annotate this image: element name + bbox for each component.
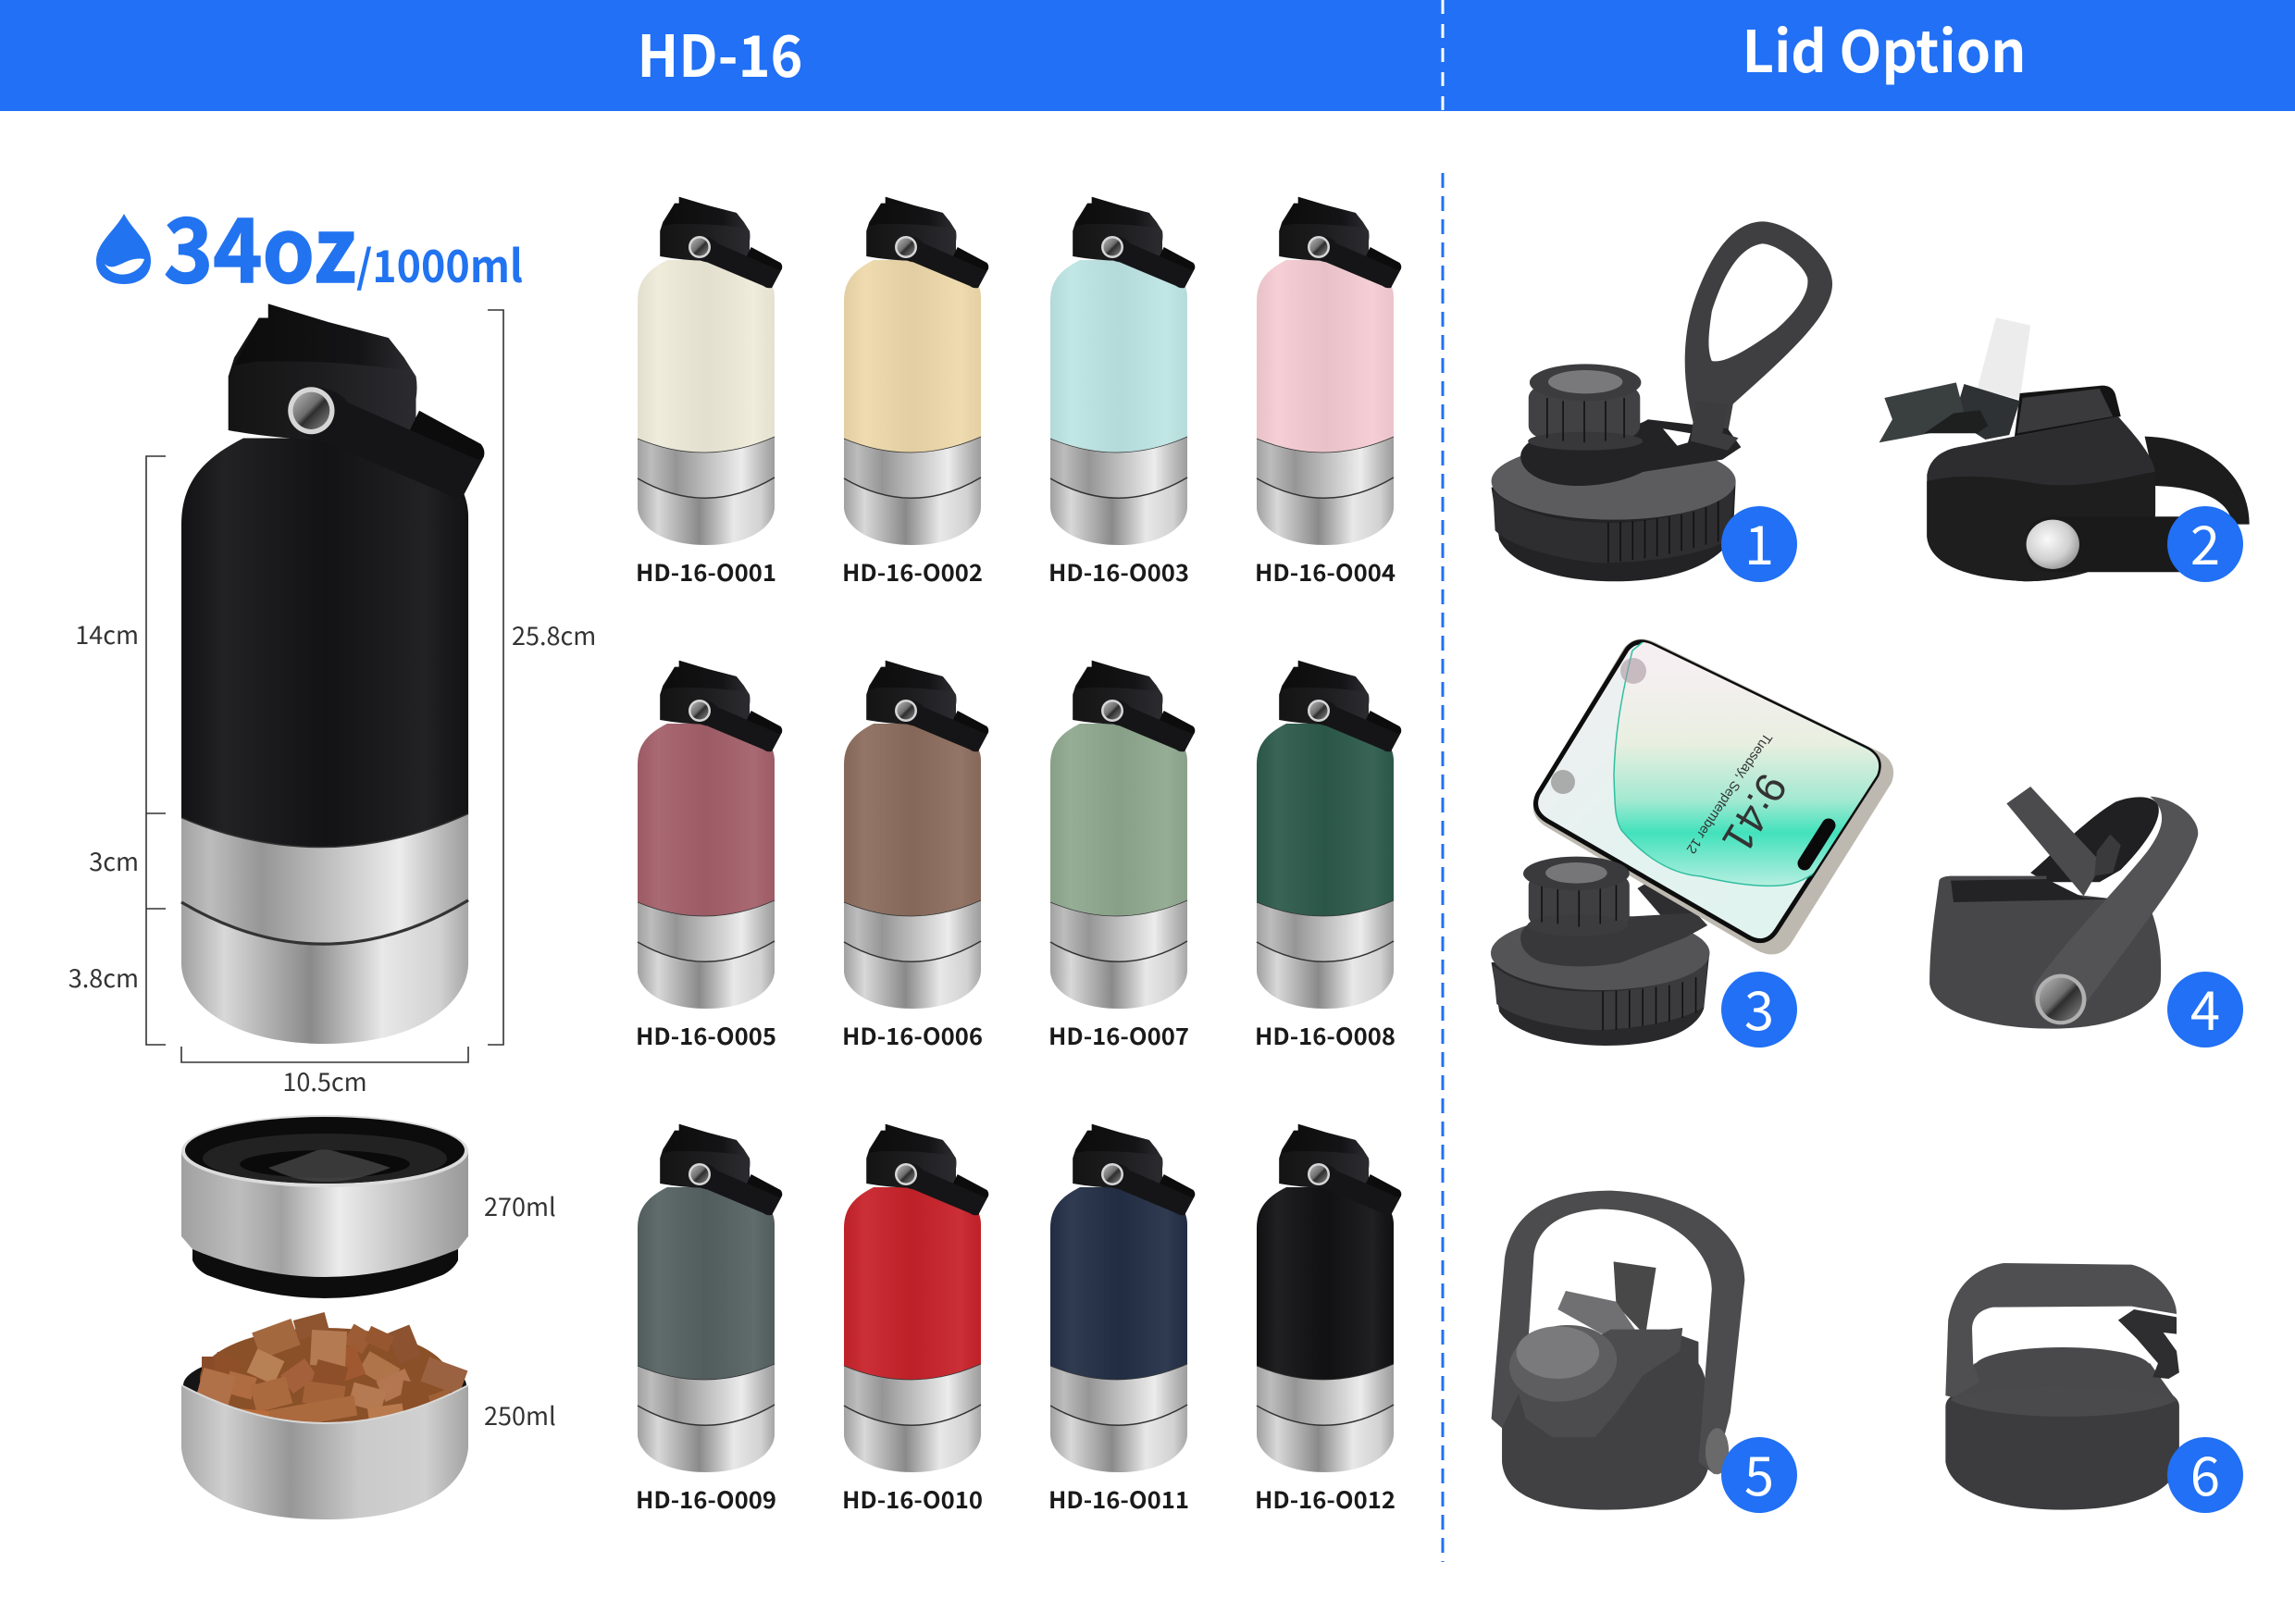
product card: HD-16-O012 (1255, 1124, 1401, 1516)
badge 2: 2 (2190, 502, 2220, 580)
code label: HD-16-O006 (842, 1019, 983, 1052)
panel: capacity (96, 180, 523, 308)
code label: HD-16-O003 (1048, 555, 1189, 589)
code label: HD-16-O007 (1048, 1019, 1189, 1052)
text: 34oz: 34oz (164, 180, 356, 308)
main bottle (181, 304, 484, 1044)
code label: HD-16-O009 (636, 1482, 776, 1516)
label: 270ml: 270ml (484, 1187, 556, 1223)
label: 3.8cm: 3.8cm (68, 959, 139, 995)
label: 25.8cm: 25.8cm (512, 616, 596, 652)
phone camera icon (1551, 770, 1575, 794)
product card: HD-16-O007 (1048, 661, 1195, 1052)
phone clock: 9:41 (1713, 765, 1797, 862)
badge 5: 5 (1744, 1433, 1774, 1511)
product card: HD-16-O002 (842, 197, 988, 589)
badge 6: 6 (2190, 1433, 2220, 1511)
dimension brackets (146, 310, 503, 1062)
lid option 2: flip straw lid (1879, 317, 2250, 582)
top bowl 270ml (181, 1115, 556, 1298)
code label: HD-16-O008 (1255, 1019, 1396, 1052)
product card: HD-16-O003 (1048, 197, 1195, 589)
product card: HD-16-O009 (636, 1124, 782, 1516)
heading: HD-16: HD-16 (637, 10, 803, 93)
code label: HD-16-O002 (842, 555, 983, 589)
code label: HD-16-O011 (1048, 1482, 1189, 1516)
product card: HD-16-O001 (636, 197, 782, 589)
phone flashlight icon (1620, 658, 1646, 684)
product card: HD-16-O008 (1255, 661, 1401, 1052)
label: 250ml: 250ml (484, 1396, 556, 1432)
badge 3 (1721, 968, 1797, 1048)
heading: Lid Option: Lid Option (1742, 6, 2027, 89)
lid option 3: phone holder lid (1491, 638, 1893, 1048)
lid option 1: knob lid with loop handle (1492, 221, 1832, 582)
badge 3: 3 (1744, 968, 1774, 1046)
panel: header bar (0, 0, 2295, 111)
text: 1000ml: /1000ml (356, 230, 523, 295)
code label: HD-16-O004 (1255, 555, 1396, 589)
badge 1 (1721, 502, 1797, 582)
code label: HD-16-O012 (1255, 1482, 1396, 1516)
lid option 6: carry loop lid (1945, 1263, 2243, 1513)
product card: HD-16-O010 (842, 1124, 988, 1516)
phone (1533, 638, 1893, 954)
bottom bowl 250ml with food (181, 1312, 556, 1519)
product card: HD-16-O006 (842, 661, 988, 1052)
badge 2 (2167, 502, 2243, 582)
code label: HD-16-O010 (842, 1482, 983, 1516)
badge 6 (2167, 1433, 2243, 1513)
label: 14cm: 14cm (75, 615, 139, 651)
badge 4: 4 (2190, 968, 2220, 1046)
badge 5 (1721, 1433, 1797, 1513)
badge 4 (2167, 968, 2243, 1048)
panel: main bottle with dimensions (68, 304, 596, 1098)
code label: HD-16-O001 (636, 555, 776, 589)
label: 10.5cm: 10.5cm (282, 1062, 367, 1098)
lid option 5: sport cap with arc handle (1492, 1191, 1797, 1513)
dynamic island (1805, 825, 1829, 863)
label: 3cm: 3cm (89, 842, 139, 878)
icon: water drop (96, 214, 151, 284)
product card: HD-16-O011 (1048, 1124, 1195, 1516)
badge 1: 1 (1744, 502, 1774, 580)
product card: HD-16-O005 (636, 661, 782, 1052)
phone date: Tuesday, September 12 (1683, 730, 1775, 856)
lid option 4: straw lid with strap (1929, 787, 2243, 1048)
product card: HD-16-O004 (1255, 197, 1401, 589)
food pieces (195, 1312, 467, 1431)
code label: HD-16-O005 (636, 1019, 776, 1052)
